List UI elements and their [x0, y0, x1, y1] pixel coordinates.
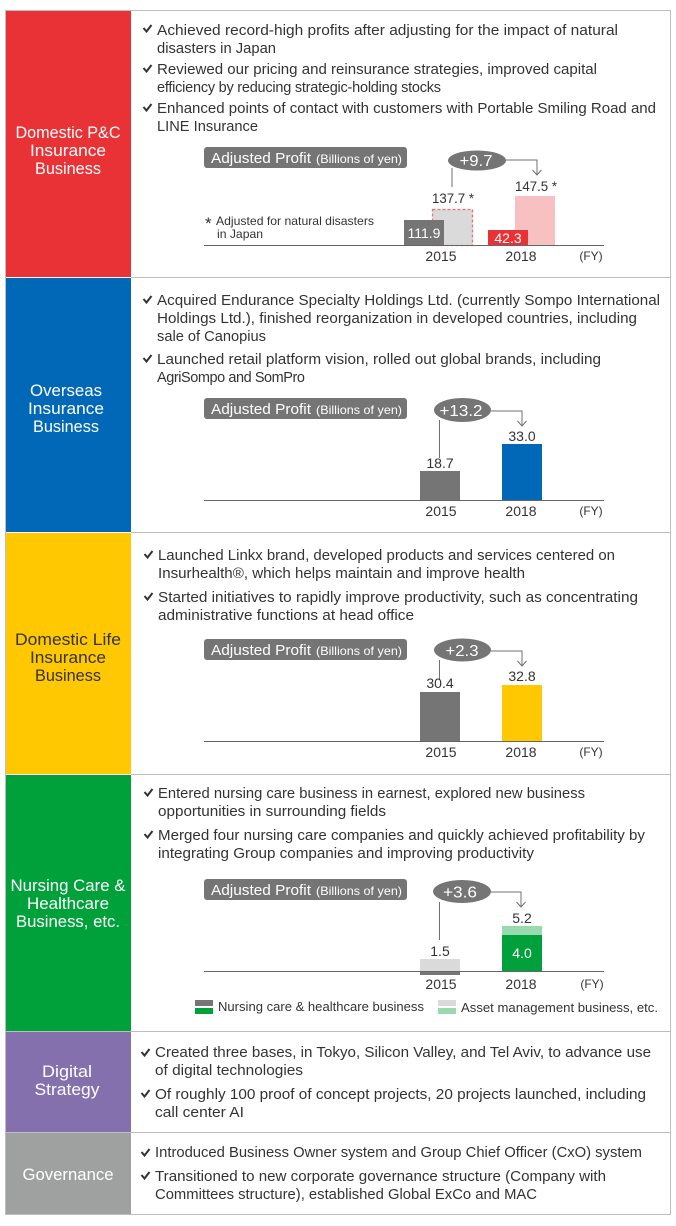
bullet list: Domestic P&C — [144, 23, 656, 135]
chart: Domestic Life adjusted profit: 30.4 — [426, 675, 454, 691]
bullet list: Digital Strategy: of digital technologies — [155, 1063, 303, 1079]
sidebar: Governance: Governance — [22, 1166, 114, 1184]
bullet list: Overseas: Launched retail platform vision, rolled out global brands, including — [157, 352, 601, 368]
panel: Domestic Life Insurance Business — [6, 533, 638, 774]
bullet list: Governance: Transitioned to new corporate governance structure (Company with — [155, 1169, 606, 1185]
sidebar: Domestic Life: Domestic Life — [15, 631, 121, 649]
bullet list: Digital Strategy: call center AI — [155, 1105, 244, 1121]
sidebar: Overseas: Business — [33, 418, 99, 436]
legend: Asset management business, etc. — [461, 1000, 658, 1015]
chart: Nursing Care adjusted profit: Adjusted Profit — [211, 883, 311, 899]
sidebar: Domestic P&C: Domestic P&C — [16, 124, 121, 142]
chart: Domestic P&C adjusted profit: Adjusted for natural disasters — [216, 214, 374, 228]
sidebar: Digital Strategy: Digital — [42, 1063, 92, 1081]
chart: Overseas adjusted profit: +13.2 — [440, 403, 483, 420]
panel: Overseas Insurance Business — [6, 278, 660, 532]
bullet list: Digital Strategy: Created three bases, in Tokyo, Silicon Valley, and Tel Aviv, to advance use — [155, 1045, 651, 1061]
chart: Domestic Life adjusted profit — [204, 638, 604, 760]
chart: Domestic Life adjusted profit: +2.3 — [446, 643, 479, 660]
sidebar: Domestic Life — [6, 533, 131, 774]
chart: Nursing Care adjusted profit: 2015 — [425, 976, 457, 992]
chart: Nursing Care adjusted profit: +3.6 — [443, 884, 477, 902]
sidebar: Domestic Life: Insurance — [30, 649, 106, 667]
sidebar: Nursing Care: Business, etc. — [16, 913, 120, 931]
chart: Domestic P&C adjusted profit: 111.9 — [408, 225, 441, 241]
bullet list: Overseas: AgriSompo and SomPro — [157, 370, 305, 386]
legend: Nursing care & healthcare business — [218, 999, 424, 1014]
bullet list: Digital Strategy: Of roughly 100 proof of concept projects, 20 projects launched, including — [155, 1087, 646, 1103]
bullet list: Overseas: Holdings Ltd.), finished reorganization in developed countries, including — [157, 311, 637, 327]
chart: Overseas adjusted profit: 18.7 — [426, 455, 454, 471]
sidebar: Digital Strategy: Strategy — [34, 1081, 100, 1099]
bullet list: Domestic P&C: Enhanced points of contact with customers with Portable Smiling Road and — [157, 101, 656, 117]
chart: Domestic P&C adjusted profit: (Billions of yen) — [316, 152, 402, 166]
sidebar: Governance — [6, 1133, 131, 1214]
bullet list: Overseas: Acquired Endurance Specialty Holdings Ltd. (currently Sompo International — [157, 293, 660, 309]
chart: Domestic P&C adjusted profit: 137.7 * — [432, 190, 475, 206]
sidebar: Domestic P&C: Business — [35, 160, 101, 178]
chart: Domestic Life adjusted profit: 2015 — [425, 744, 457, 760]
sidebar: Domestic Life: Business — [35, 667, 101, 685]
bullet list: Domestic Life: Launched Linkx brand, developed products and services centered on — [158, 548, 615, 564]
panel: Governance — [6, 1133, 642, 1214]
sidebar: Domestic P&C — [6, 11, 131, 277]
bullet list: Domestic P&C: Reviewed our pricing and reinsurance strategies, improved capital — [157, 62, 597, 78]
chart: Domestic P&C adjusted profit: Adjusted Profit — [211, 151, 311, 167]
legend — [195, 999, 658, 1015]
sidebar: Overseas: Insurance — [28, 400, 104, 418]
chart: Domestic Life adjusted profit: (FY) — [579, 745, 603, 759]
bullet list: Domestic P&C: efficiency by reducing strategic-holding stocks — [157, 80, 441, 96]
panel: Domestic P&C Insurance Business — [6, 11, 670, 277]
bullet list: Nursing Care: integrating Group companies and improving productivity — [158, 846, 535, 862]
chart: Nursing Care adjusted profit — [195, 879, 658, 1015]
bullet list: Domestic P&C: disasters in Japan — [157, 41, 276, 57]
bullet list: Nursing Care — [144, 786, 646, 862]
chart: Overseas adjusted profit — [204, 398, 604, 519]
sidebar: Domestic P&C: Insurance — [30, 142, 106, 160]
chart: Nursing Care adjusted profit: (FY) — [580, 977, 604, 991]
chart: Nursing Care adjusted profit: 5.2 — [512, 910, 532, 926]
sidebar: Nursing Care: Healthcare — [27, 895, 109, 913]
bullet list: Domestic Life: administrative functions at head office — [158, 608, 414, 624]
chart: Domestic P&C adjusted profit: 2015 — [425, 248, 457, 264]
sidebar: Overseas — [6, 278, 131, 532]
chart: Overseas adjusted profit: (Billions of yen) — [316, 403, 402, 417]
chart: Domestic Life adjusted profit: 2018 — [505, 744, 537, 760]
chart: Overseas adjusted profit: Adjusted Profit — [211, 402, 311, 418]
sidebar: Digital Strategy — [6, 1032, 131, 1132]
bullet list: Nursing Care: Entered nursing care business in earnest, explored new business — [158, 786, 585, 802]
bullet list: Digital Strategy — [142, 1045, 651, 1121]
chart: Domestic Life adjusted profit: Adjusted Profit — [211, 643, 311, 659]
bullet list: Overseas — [144, 293, 660, 386]
panel: Digital Strategy — [6, 1032, 651, 1132]
chart: Domestic P&C adjusted profit: +9.7 — [460, 153, 493, 170]
bullet list: Domestic Life: Started initiatives to rapidly improve productivity, such as concentrating — [158, 590, 638, 606]
bullet list: Domestic Life: Insurhealth®, which helps maintain and improve health — [158, 566, 525, 582]
chart: Overseas adjusted profit: 33.0 — [508, 428, 536, 444]
chart: Domestic P&C adjusted profit — [204, 147, 604, 264]
chart: Nursing Care adjusted profit: 4.0 — [512, 945, 532, 961]
chart: Domestic P&C adjusted profit: 2018 — [505, 248, 537, 264]
bullet list: Nursing Care: opportunities in surrounding fields — [158, 804, 386, 820]
bullet list: Governance — [142, 1145, 642, 1203]
bullet list: Governance: Committees structure), established Global ExCo and MAC — [155, 1187, 537, 1203]
bullet list: Nursing Care: Merged four nursing care companies and quickly achieved profitability by — [158, 828, 646, 844]
chart: Overseas adjusted profit: (FY) — [579, 504, 603, 518]
chart: Nursing Care adjusted profit: (Billions of yen) — [316, 884, 402, 898]
chart: Domestic P&C adjusted profit: * — [205, 214, 212, 233]
panel: Nursing Care & Healthcare Business — [6, 775, 658, 1031]
bullet list: Governance: Introduced Business Owner system and Group Chief Officer (CxO) system — [155, 1145, 642, 1161]
bullet list: Domestic P&C: Achieved record-high profits after adjusting for the impact of natural — [157, 23, 618, 39]
sidebar: Overseas: Overseas — [30, 382, 102, 400]
chart: Domestic Life adjusted profit: (Billions of yen) — [316, 644, 402, 658]
chart: Domestic P&C adjusted profit: (FY) — [579, 249, 603, 263]
chart: Overseas adjusted profit: 2015 — [425, 503, 457, 519]
sidebar: Nursing Care: Nursing Care & — [10, 877, 126, 895]
chart: Nursing Care adjusted profit: 2018 — [505, 976, 537, 992]
chart: Overseas adjusted profit: 2018 — [505, 503, 537, 519]
chart: Nursing Care adjusted profit: 1.5 — [430, 943, 450, 959]
chart: Domestic Life adjusted profit: 32.8 — [508, 668, 536, 684]
bullet list: Overseas: sale of Canopius — [157, 329, 266, 345]
sidebar: Nursing Care — [6, 775, 131, 1031]
chart: Domestic P&C adjusted profit: 42.3 — [494, 230, 522, 246]
bullet list: Domestic Life — [144, 548, 638, 624]
bullet list: Domestic P&C: LINE Insurance — [157, 119, 258, 135]
chart: Domestic P&C adjusted profit: 147.5 * — [515, 178, 558, 194]
chart: Domestic P&C adjusted profit: in Japan — [217, 227, 263, 241]
